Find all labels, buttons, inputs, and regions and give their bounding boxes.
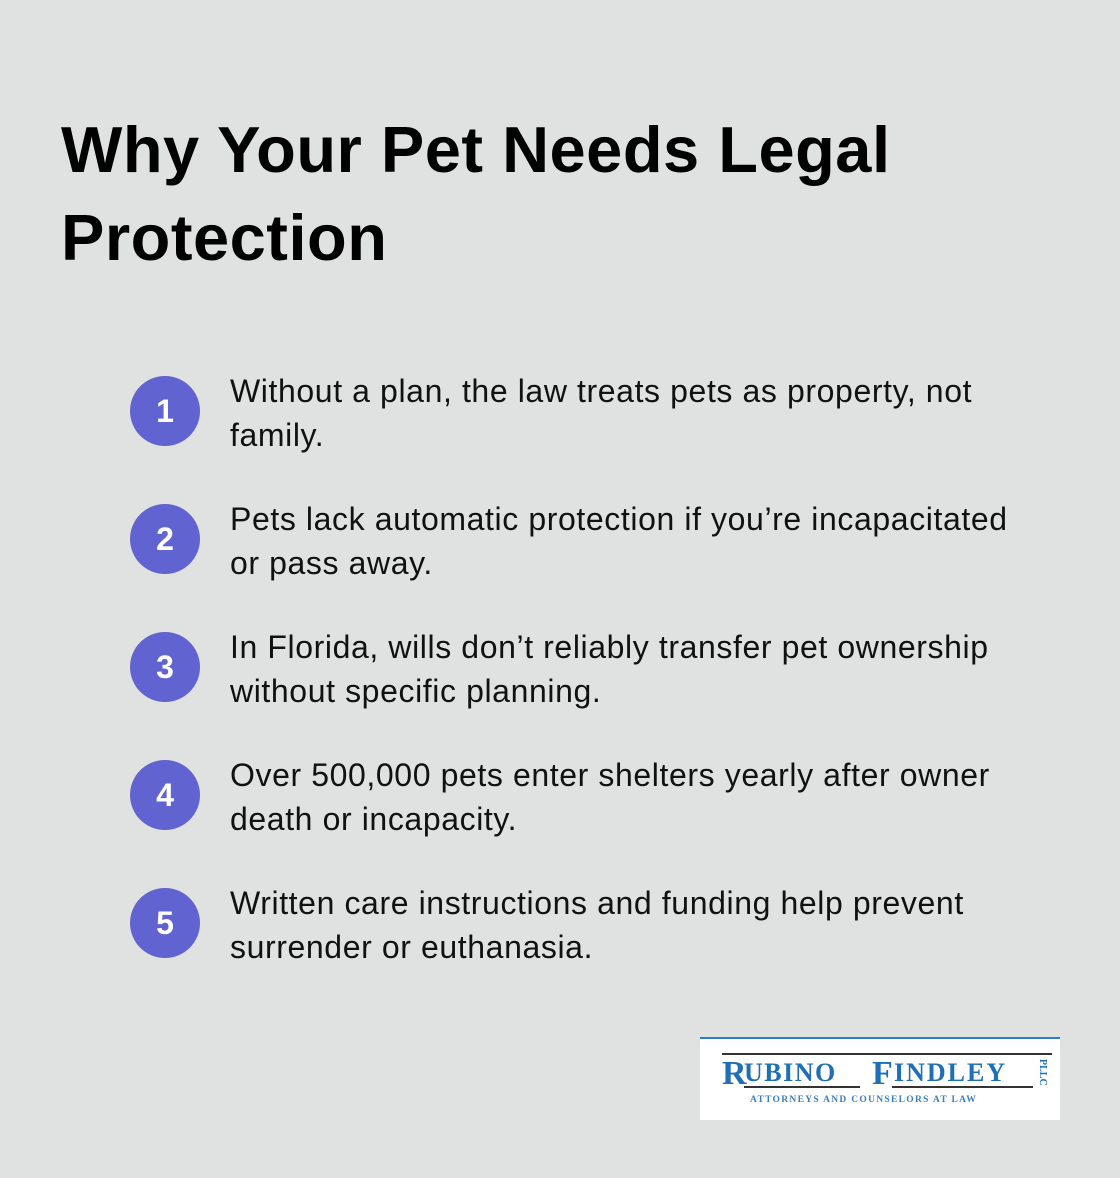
logo: INDLEY xyxy=(894,1058,1007,1087)
item 4: death or incapacity. xyxy=(230,801,517,837)
title: Why Your Pet Needs Legal xyxy=(61,113,891,186)
item 5: 5 xyxy=(156,905,174,941)
item 5: surrender or euthanasia. xyxy=(230,929,593,965)
logo: PLLC xyxy=(1037,1059,1048,1086)
item 5: Written care instructions and funding help prevent xyxy=(230,885,964,921)
item 4: 4 xyxy=(156,777,174,813)
item 1: 1 xyxy=(156,393,174,429)
title xyxy=(61,113,891,274)
logo: UBINO xyxy=(744,1058,837,1087)
item 3 xyxy=(130,629,989,709)
logo: ATTORNEYS AND COUNSELORS AT LAW xyxy=(750,1095,977,1105)
item 2 xyxy=(130,501,1008,581)
item 3: In Florida, wills don’t reliably transfer pet ownership xyxy=(230,629,989,665)
logo: R xyxy=(722,1055,747,1092)
item 1: family. xyxy=(230,417,324,453)
item 4 xyxy=(130,757,990,837)
title: Protection xyxy=(61,201,387,274)
logo xyxy=(700,1037,1060,1120)
item 4: Over 500,000 pets enter shelters yearly after owner xyxy=(230,757,990,793)
item 1: Without a plan, the law treats pets as property, not xyxy=(230,373,972,409)
item 2: Pets lack automatic protection if you’re incapacitated xyxy=(230,501,1008,537)
item 2: 2 xyxy=(156,521,174,557)
logo: F xyxy=(872,1055,893,1092)
item 5 xyxy=(130,885,964,965)
item 3: without specific planning. xyxy=(230,673,601,709)
item 1 xyxy=(130,373,972,453)
item 3: 3 xyxy=(156,649,174,685)
item 2: or pass away. xyxy=(230,545,433,581)
